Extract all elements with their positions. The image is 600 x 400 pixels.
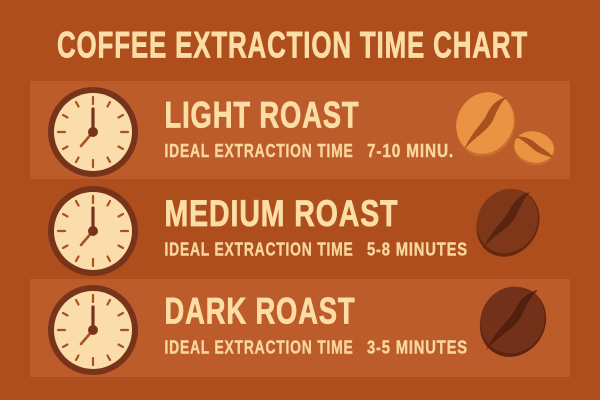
text: dark roast extraction time: 3-5 MINUTES — [367, 338, 468, 358]
panel: light roast — [30, 81, 570, 179]
icon: clock dark roast — [48, 285, 138, 375]
icon: dark coffee bean — [467, 274, 559, 369]
heading: medium roast: MEDIUM ROAST — [164, 193, 398, 234]
text: light roast extraction time: 7-10 MINU. — [367, 141, 454, 161]
icon: clock medium roast — [48, 186, 138, 276]
text: medium roast extraction time: IDEAL EXTRACTION TIME — [164, 240, 354, 260]
heading: light roast: LIGHT ROAST — [164, 94, 360, 136]
icon: light coffee beans — [445, 82, 558, 169]
panel: medium roast — [48, 177, 552, 276]
text: dark roast extraction time: IDEAL EXTRACTION TIME — [164, 338, 354, 358]
heading: dark roast: DARK ROAST — [164, 290, 356, 332]
panel: dark roast — [30, 274, 570, 377]
icon: clock light roast — [48, 87, 138, 177]
text: medium roast extraction time: 5-8 MINUTES — [367, 240, 468, 260]
text: light roast extraction time: IDEAL EXTRACTION TIME — [164, 141, 354, 161]
icon: medium coffee bean — [464, 177, 552, 269]
